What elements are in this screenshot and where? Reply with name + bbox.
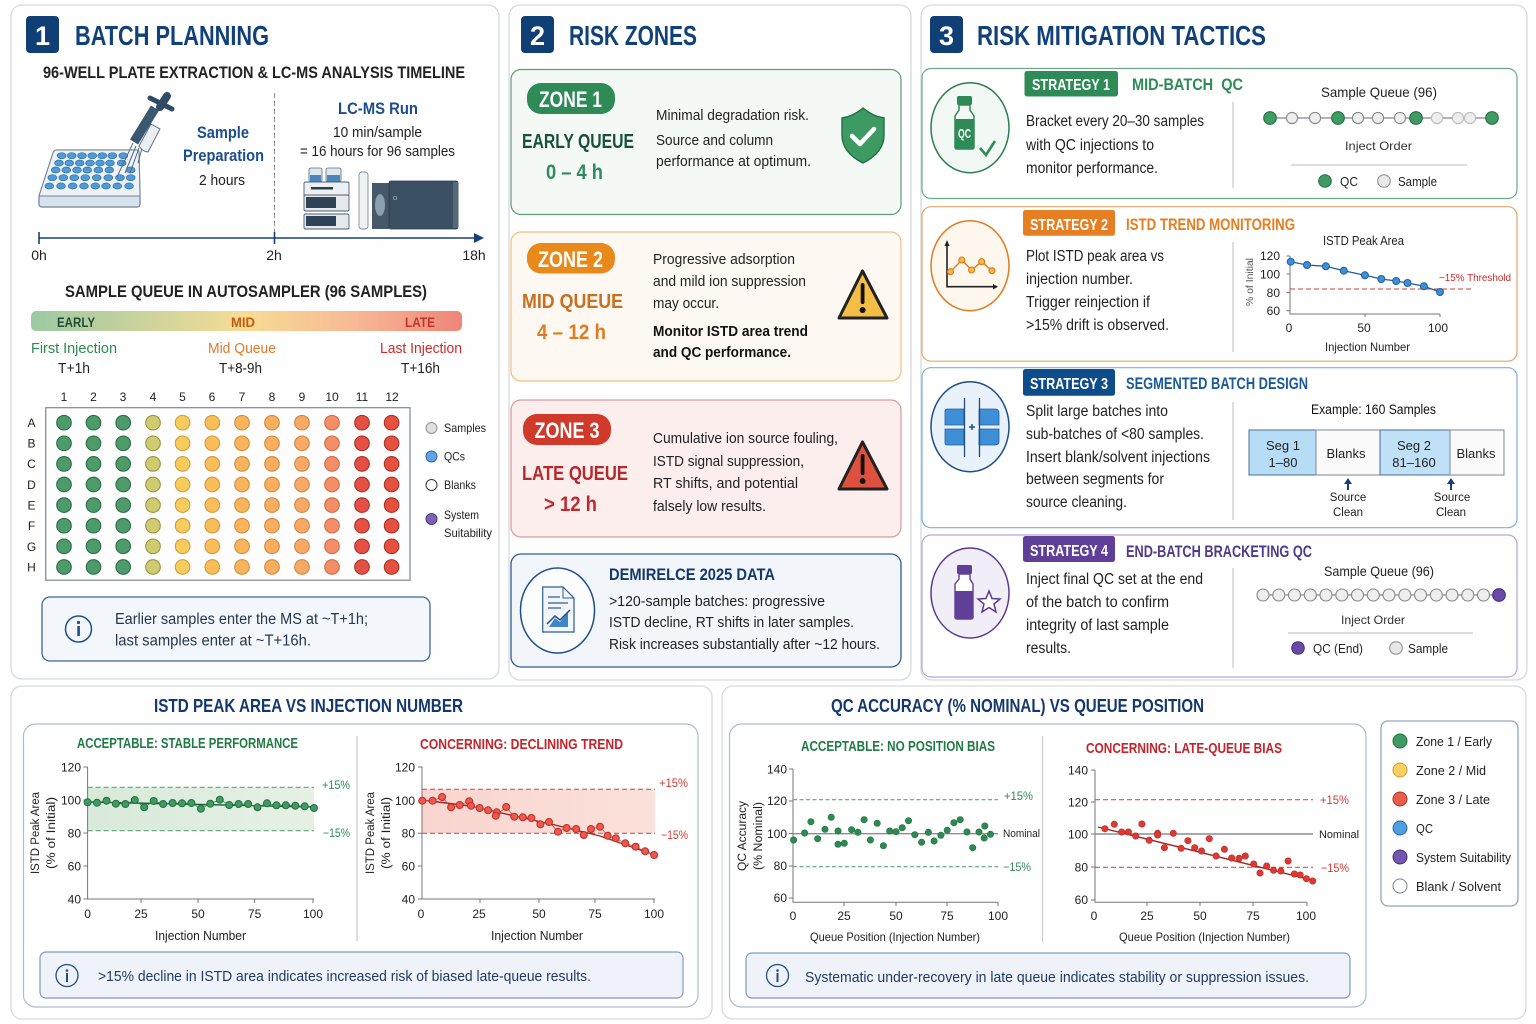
96-well plate map: 9 xyxy=(299,390,306,404)
chart: late-queue bias: Queue Position (Injection Number) xyxy=(1119,930,1290,944)
chart: no position bias xyxy=(737,739,1040,944)
badge 2: 2 xyxy=(530,21,545,51)
chart: istd peak area mini: 100 xyxy=(1428,321,1448,335)
panel: qc accuracy vs queue position xyxy=(722,686,1526,1019)
strategy 3 text xyxy=(1026,403,1210,511)
subheading: timeline: 96-WELL PLATE EXTRACTION & LC-MS ANALYSIS TIMELINE xyxy=(43,63,465,82)
zone 3 card: Cumulative ion source fouling, xyxy=(653,431,838,447)
chart: istd peak area mini: 0 xyxy=(1286,321,1293,335)
chart: late-queue bias: −15% xyxy=(1321,861,1349,875)
label: sample preparation: Preparation xyxy=(183,146,264,165)
strategy 1 label: MID-BATCH QC xyxy=(1132,76,1243,94)
chart: no position bias: (% Nominal) xyxy=(753,802,765,870)
callout: injection timing xyxy=(42,597,430,661)
chart: stable istd performance: 0 xyxy=(84,907,91,921)
timeline arrow xyxy=(31,232,486,263)
zone 2 card: 4 – 12 h xyxy=(537,321,606,344)
chart: no position bias: 120 xyxy=(767,794,787,808)
chart: no position bias: Queue Position (Injection Number) xyxy=(810,930,980,944)
chart: istd peak area mini xyxy=(1245,234,1511,354)
96-well plate map: 7 xyxy=(239,390,246,404)
icon: shield check xyxy=(842,108,884,163)
zone 1 card xyxy=(511,70,901,214)
strategy 3 card xyxy=(922,368,1517,528)
strategy 3 label: STRATEGY 3 xyxy=(1030,376,1108,393)
96-well plate map: H xyxy=(27,560,36,574)
arrow: source clean 2: Source xyxy=(1434,492,1470,504)
strategy 2 text xyxy=(1026,248,1169,334)
strategy 2 label xyxy=(1023,210,1295,236)
chart: declining istd trend: 25 xyxy=(472,907,486,921)
plate legend: Suitability xyxy=(444,526,492,540)
chart: stable istd performance: Injection Number xyxy=(155,929,246,943)
chart: stable istd performance: 60 xyxy=(68,860,81,874)
legend: zones and sample types: Zone 3 / Late xyxy=(1416,793,1490,807)
icon: qc vial xyxy=(931,83,1009,173)
data card: demirelce 2025: DEMIRELCE 2025 DATA xyxy=(609,565,775,584)
chart: stable istd performance: ISTD Peak Area xyxy=(30,791,42,874)
zone 2 card: may occur. xyxy=(653,296,719,312)
chart: stable istd performance: ACCEPTABLE: STABLE PERFORMANCE xyxy=(77,736,298,752)
chart: declining istd trend: 75 xyxy=(588,907,602,921)
panel: istd peak area vs injection number xyxy=(11,686,712,1019)
zone 3 card: ZONE 3 xyxy=(534,418,600,443)
chart: stable istd performance: −15% xyxy=(323,826,350,840)
label: lc-ms run: = 16 hours for 96 samples xyxy=(300,144,455,160)
arrow: source clean 2: Clean xyxy=(1436,507,1466,519)
legend: zones and sample types: Zone 1 / Early xyxy=(1416,735,1493,749)
segmented batch diagram: Blanks xyxy=(1456,446,1496,461)
strategy 3 text: source cleaning. xyxy=(1026,494,1127,511)
segmented batch diagram: 81–160 xyxy=(1392,455,1436,470)
legend: zones and sample types: Blank / Solvent xyxy=(1416,880,1502,894)
sample queue chain with qc: Inject Order xyxy=(1345,139,1412,153)
legend: zones and sample types: Zone 2 / Mid xyxy=(1416,764,1486,778)
chart: late-queue bias: 25 xyxy=(1140,909,1154,923)
badge 3: 3 xyxy=(939,21,954,51)
chart: stable istd performance: 100 xyxy=(303,907,323,921)
data card: demirelce 2025: ISTD decline, RT shifts in later samples. xyxy=(609,615,854,631)
legend: zones and sample types: QC xyxy=(1416,822,1433,836)
queue gradient bar: MID xyxy=(231,315,255,330)
96-well plate map: 1 xyxy=(61,390,68,404)
sample queue chain with end qc xyxy=(1257,563,1505,656)
badge 1 xyxy=(26,16,59,53)
sample queue chain with qc xyxy=(1264,84,1498,189)
queue timing labels xyxy=(31,341,462,377)
96-well plate map: E xyxy=(27,498,36,512)
chart: declining istd trend: ISTD Peak Area xyxy=(365,791,377,874)
callout: injection timing: last samples enter at ~T+16h. xyxy=(115,632,311,650)
strategy 2 text: >15% drift is observed. xyxy=(1026,317,1169,334)
queue timing labels: T+8-9h xyxy=(219,361,262,377)
icon: split batch xyxy=(931,382,1009,472)
chart: stable istd performance: 100 xyxy=(61,794,81,808)
strategy 3 label: SEGMENTED BATCH DESIGN xyxy=(1126,375,1308,393)
chart: late-queue bias: 80 xyxy=(1075,860,1088,874)
chart: stable istd performance: 80 xyxy=(68,826,81,840)
chart: declining istd trend: Injection Number xyxy=(491,929,583,943)
chart: no position bias: 50 xyxy=(889,909,903,923)
queue gradient bar xyxy=(31,311,462,331)
zone 1 card: EARLY QUEUE xyxy=(522,131,634,153)
callout: late queue under-recovery: Systematic under-recovery in late queue indicates stability or suppression issues. xyxy=(805,970,1309,986)
strategy 4 label xyxy=(1023,536,1312,562)
chart: stable istd performance: 40 xyxy=(68,892,81,906)
96-well plate map: 8 xyxy=(269,390,276,404)
strategy 1 label: STRATEGY 1 xyxy=(1032,77,1110,94)
chart: no position bias: ACCEPTABLE: NO POSITION BIAS xyxy=(801,739,995,755)
chart: declining istd trend: 100 xyxy=(395,794,415,808)
chart: no position bias: 100 xyxy=(767,827,787,841)
icon: danger triangle xyxy=(839,442,887,489)
chart: no position bias: 140 xyxy=(767,762,787,776)
label: sample preparation xyxy=(183,123,264,189)
callout: late queue under-recovery xyxy=(746,953,1350,998)
zone 2 card: Progressive adsorption xyxy=(653,252,795,268)
chart: stable istd performance: +15% xyxy=(322,778,350,792)
chart: istd peak area mini: 120 xyxy=(1260,249,1280,263)
chart: late-queue bias: 50 xyxy=(1193,909,1207,923)
heading: risk mitigation tactics: RISK MITIGATION TACTICS xyxy=(977,20,1266,51)
arrow: source clean 2 xyxy=(1434,478,1470,519)
chart: stable istd performance: 120 xyxy=(61,760,81,774)
plate legend: System xyxy=(444,508,479,522)
strategy 2 text: injection number. xyxy=(1026,271,1133,288)
96-well plate map: 3 xyxy=(120,390,127,404)
zone 3 card: falsely low results. xyxy=(653,499,766,515)
strategy 3 text: Split large batches into xyxy=(1026,403,1168,420)
sample queue chain with end qc: QC (End) xyxy=(1313,641,1363,656)
zone 2 card: ZONE 2 xyxy=(538,247,603,272)
segmented batch diagram: 1–80 xyxy=(1269,455,1297,470)
strategy 2 text: Trigger reinjection if xyxy=(1026,294,1151,311)
chart: stable istd performance: 50 xyxy=(191,907,205,921)
96-well plate map xyxy=(27,390,410,580)
chart: no position bias: 100 xyxy=(988,909,1008,923)
panel: risk zones xyxy=(509,5,911,680)
heading: risk zones: RISK ZONES xyxy=(569,20,697,51)
96-well plate map: 5 xyxy=(179,390,186,404)
chart section title: ISTD PEAK AREA VS INJECTION NUMBER xyxy=(154,696,463,716)
sample queue chain with end qc: Sample xyxy=(1408,641,1448,656)
callout: injection timing: Earlier samples enter the MS at ~T+1h; xyxy=(115,611,368,628)
chart: no position bias: +15% xyxy=(1004,789,1033,803)
strategy 4 text xyxy=(1026,571,1203,657)
label: sample preparation: Sample xyxy=(197,123,249,142)
segmented batch diagram: Seg 2 xyxy=(1397,438,1431,453)
panel: risk mitigation tactics xyxy=(921,5,1527,680)
timeline arrow: 18h xyxy=(462,247,486,263)
96-well plate map: 6 xyxy=(209,390,216,404)
zone 3 card: > 12 h xyxy=(544,493,597,516)
chart: istd peak area mini: Injection Number xyxy=(1325,340,1410,354)
96-well plate map: B xyxy=(27,436,36,450)
chart: declining istd trend: +15% xyxy=(659,776,688,790)
chart: late-queue bias: Nominal xyxy=(1319,829,1359,841)
zone 1 card: 0 – 4 h xyxy=(546,161,603,184)
badge 2 xyxy=(521,16,554,53)
chart: istd peak area mini: −15% Threshold xyxy=(1439,272,1511,284)
strategy 2 text: Plot ISTD peak area vs xyxy=(1026,248,1164,265)
segmented batch diagram: Example: 160 Samples xyxy=(1311,402,1436,417)
plate legend xyxy=(426,421,492,540)
chart: late-queue bias: 0 xyxy=(1091,909,1098,923)
chart: no position bias: 0 xyxy=(790,909,797,923)
chart: late-queue bias: 60 xyxy=(1075,893,1088,907)
zone 3 card xyxy=(511,400,901,537)
96-well plate map: 11 xyxy=(356,390,369,404)
label: lc-ms run: 10 min/sample xyxy=(333,125,422,141)
chart: declining istd trend: 80 xyxy=(402,826,415,840)
chart: late-queue bias: 120 xyxy=(1068,796,1088,810)
subheading: sample queue: SAMPLE QUEUE IN AUTOSAMPLER (96 SAMPLES) xyxy=(65,283,427,301)
timeline arrow: 0h xyxy=(31,247,47,263)
heading: batch planning: BATCH PLANNING xyxy=(75,20,269,51)
queue timing labels: T+1h xyxy=(58,361,90,377)
zone 2 card xyxy=(511,232,901,381)
badge 1: 1 xyxy=(35,21,50,51)
chart: stable istd performance: (% of Initial) xyxy=(46,797,58,869)
chart: declining istd trend: 60 xyxy=(402,860,415,874)
chart: late-queue bias xyxy=(1068,741,1359,944)
96-well plate map: 2 xyxy=(90,390,97,404)
queue timing labels: First Injection xyxy=(31,341,117,357)
callout: istd decline: >15% decline in ISTD area indicates increased risk of biased late-queue results. xyxy=(98,969,591,985)
badge 3 xyxy=(930,16,963,53)
chart: stable istd performance xyxy=(30,736,350,943)
chart: no position bias: 75 xyxy=(940,909,954,923)
chart: no position bias: −15% xyxy=(1003,860,1031,874)
sample queue chain with qc: Sample xyxy=(1398,174,1437,189)
legend: zones and sample types xyxy=(1381,721,1518,906)
plate legend: QCs xyxy=(444,450,465,464)
chart: no position bias: 80 xyxy=(774,859,787,873)
strategy 1 text: monitor performance. xyxy=(1026,160,1158,177)
strategy 4 label: STRATEGY 4 xyxy=(1030,543,1108,560)
sample queue chain with qc: QC xyxy=(1340,174,1358,189)
chart: declining istd trend xyxy=(365,737,688,943)
strategy 1 text: with QC injections to xyxy=(1025,137,1154,154)
96-well plate map: A xyxy=(27,416,36,430)
icon: vial and star xyxy=(931,548,1009,638)
chart: late-queue bias: 75 xyxy=(1246,909,1260,923)
sample queue chain with end qc: Sample Queue (96) xyxy=(1324,563,1434,579)
arrow: source clean 1: Source xyxy=(1330,492,1366,504)
icon: lc-ms instrument xyxy=(304,168,458,229)
icon: document with chart xyxy=(520,568,594,653)
zone 2 card: MID QUEUE xyxy=(522,291,623,313)
data card: demirelce 2025: >120-sample batches: progressive xyxy=(609,594,825,610)
chart: declining istd trend: 0 xyxy=(418,907,425,921)
label: sample preparation: 2 hours xyxy=(199,173,245,189)
arrow: source clean 1 xyxy=(1330,478,1366,519)
chart: declining istd trend: 100 xyxy=(644,907,664,921)
zone 1 card: ZONE 1 xyxy=(539,87,602,112)
chart: no position bias: QC Accuracy xyxy=(737,801,749,871)
sample queue chain with end qc: Inject Order xyxy=(1341,613,1405,627)
data card: demirelce 2025 xyxy=(511,554,901,667)
strategy 4 text: Inject final QC set at the end xyxy=(1026,571,1203,588)
queue timing labels: Last Injection xyxy=(380,341,462,357)
callout: istd decline xyxy=(40,952,683,998)
strategy 4 text: of the batch to confirm xyxy=(1026,594,1169,611)
icon: trend chart xyxy=(931,221,1009,311)
chart: late-queue bias: 100 xyxy=(1296,909,1316,923)
segmented batch diagram: Blanks xyxy=(1326,446,1366,461)
zone 3 card: RT shifts, and potential xyxy=(653,476,798,492)
chart: istd peak area mini: 80 xyxy=(1267,286,1280,300)
96-well plate map: D xyxy=(27,478,36,492)
plate legend: Samples xyxy=(444,421,486,435)
strategy 2 label: ISTD TREND MONITORING xyxy=(1126,216,1295,234)
96-well plate map: 4 xyxy=(150,390,157,404)
label: lc-ms run xyxy=(300,99,455,160)
sample queue chain with qc: Sample Queue (96) xyxy=(1321,84,1437,100)
queue gradient bar: EARLY xyxy=(57,315,95,330)
strategy 4 card xyxy=(922,535,1517,677)
chart: declining istd trend: CONCERNING: DECLINING TREND xyxy=(420,737,623,753)
chart: istd peak area mini: % of Initial xyxy=(1245,258,1256,306)
chart: istd peak area mini: 60 xyxy=(1267,304,1280,318)
chart: stable istd performance: 75 xyxy=(248,907,262,921)
chart: late-queue bias: 100 xyxy=(1068,828,1088,842)
strategy 3 text: Insert blank/solvent injections xyxy=(1026,449,1210,466)
chart: declining istd trend: (% of Initial) xyxy=(381,797,393,869)
chart: no position bias: 60 xyxy=(774,891,787,905)
96-well plate map: F xyxy=(28,519,35,533)
icon: qc vial: QC xyxy=(958,126,971,141)
data card: demirelce 2025: Risk increases substantially after ~12 hours. xyxy=(609,637,880,653)
96-well plate map: 10 xyxy=(325,390,339,404)
strategy 1 text: Bracket every 20–30 samples xyxy=(1026,113,1204,130)
chart: declining istd trend: 120 xyxy=(395,760,415,774)
strategy 3 text: between segments for xyxy=(1026,471,1164,488)
strategy 4 text: results. xyxy=(1026,640,1071,657)
chart: stable istd performance: 25 xyxy=(134,907,148,921)
chart: late-queue bias: 140 xyxy=(1068,764,1088,778)
chart: istd peak area mini: ISTD Peak Area xyxy=(1323,234,1404,248)
segmented batch diagram xyxy=(1249,402,1504,519)
strategy 4 label: END-BATCH BRACKETING QC xyxy=(1126,543,1312,561)
strategy 4 text: integrity of last sample xyxy=(1026,617,1169,634)
strategy 1 text xyxy=(1025,113,1204,177)
icon: well plate and pipette xyxy=(39,96,172,207)
strategy 1 card xyxy=(922,68,1517,198)
chart: late-queue bias: +15% xyxy=(1320,793,1349,807)
strategy 2 card xyxy=(922,207,1517,361)
queue timing labels: T+16h xyxy=(401,361,440,377)
zone 3 card: ISTD signal suppression, xyxy=(653,454,804,470)
zone 1 card: performance at optimum. xyxy=(656,154,811,170)
queue timing labels: Mid Queue xyxy=(208,341,276,357)
chart: late-queue bias: CONCERNING: LATE-QUEUE BIAS xyxy=(1086,741,1282,757)
zone 3 card: LATE QUEUE xyxy=(522,463,628,485)
96-well plate map: C xyxy=(27,457,36,471)
96-well plate map: G xyxy=(27,540,36,554)
segmented batch diagram: Seg 1 xyxy=(1266,438,1300,453)
plate legend: Blanks xyxy=(444,478,476,492)
chart: istd peak area mini: 100 xyxy=(1260,268,1280,282)
strategy 1 label xyxy=(1024,71,1243,96)
zone 1 card: Minimal degradation risk. xyxy=(656,108,809,124)
chart: no position bias: 25 xyxy=(837,909,851,923)
zone 2 card: and mild ion suppression xyxy=(653,274,806,290)
zone 1 card: Source and column xyxy=(656,133,773,149)
chart: declining istd trend: −15% xyxy=(661,828,688,842)
chart: no position bias: Nominal xyxy=(1003,828,1040,840)
queue gradient bar: LATE xyxy=(405,315,435,330)
chart: declining istd trend: 40 xyxy=(402,892,415,906)
chart: istd peak area mini: 50 xyxy=(1357,321,1371,335)
chart: declining istd trend: 50 xyxy=(532,907,546,921)
chart section title: QC ACCURACY (% NOMINAL) VS QUEUE POSITION xyxy=(831,696,1204,716)
strategy 3 label xyxy=(1023,369,1308,396)
icon: warning triangle xyxy=(839,271,887,318)
arrow: source clean 1: Clean xyxy=(1333,507,1363,519)
strategy 3 text: sub-batches of <80 samples. xyxy=(1026,426,1204,443)
label: lc-ms run: LC-MS Run xyxy=(338,99,418,118)
panel: batch planning xyxy=(11,5,499,679)
strategy 2 label: STRATEGY 2 xyxy=(1030,217,1108,234)
legend: zones and sample types: System Suitability xyxy=(1416,851,1512,865)
zone 2 card: Monitor ISTD area trend xyxy=(653,324,808,340)
96-well plate map: 12 xyxy=(385,390,399,404)
timeline arrow: 2h xyxy=(266,247,282,263)
zone 2 card: and QC performance. xyxy=(653,345,791,361)
